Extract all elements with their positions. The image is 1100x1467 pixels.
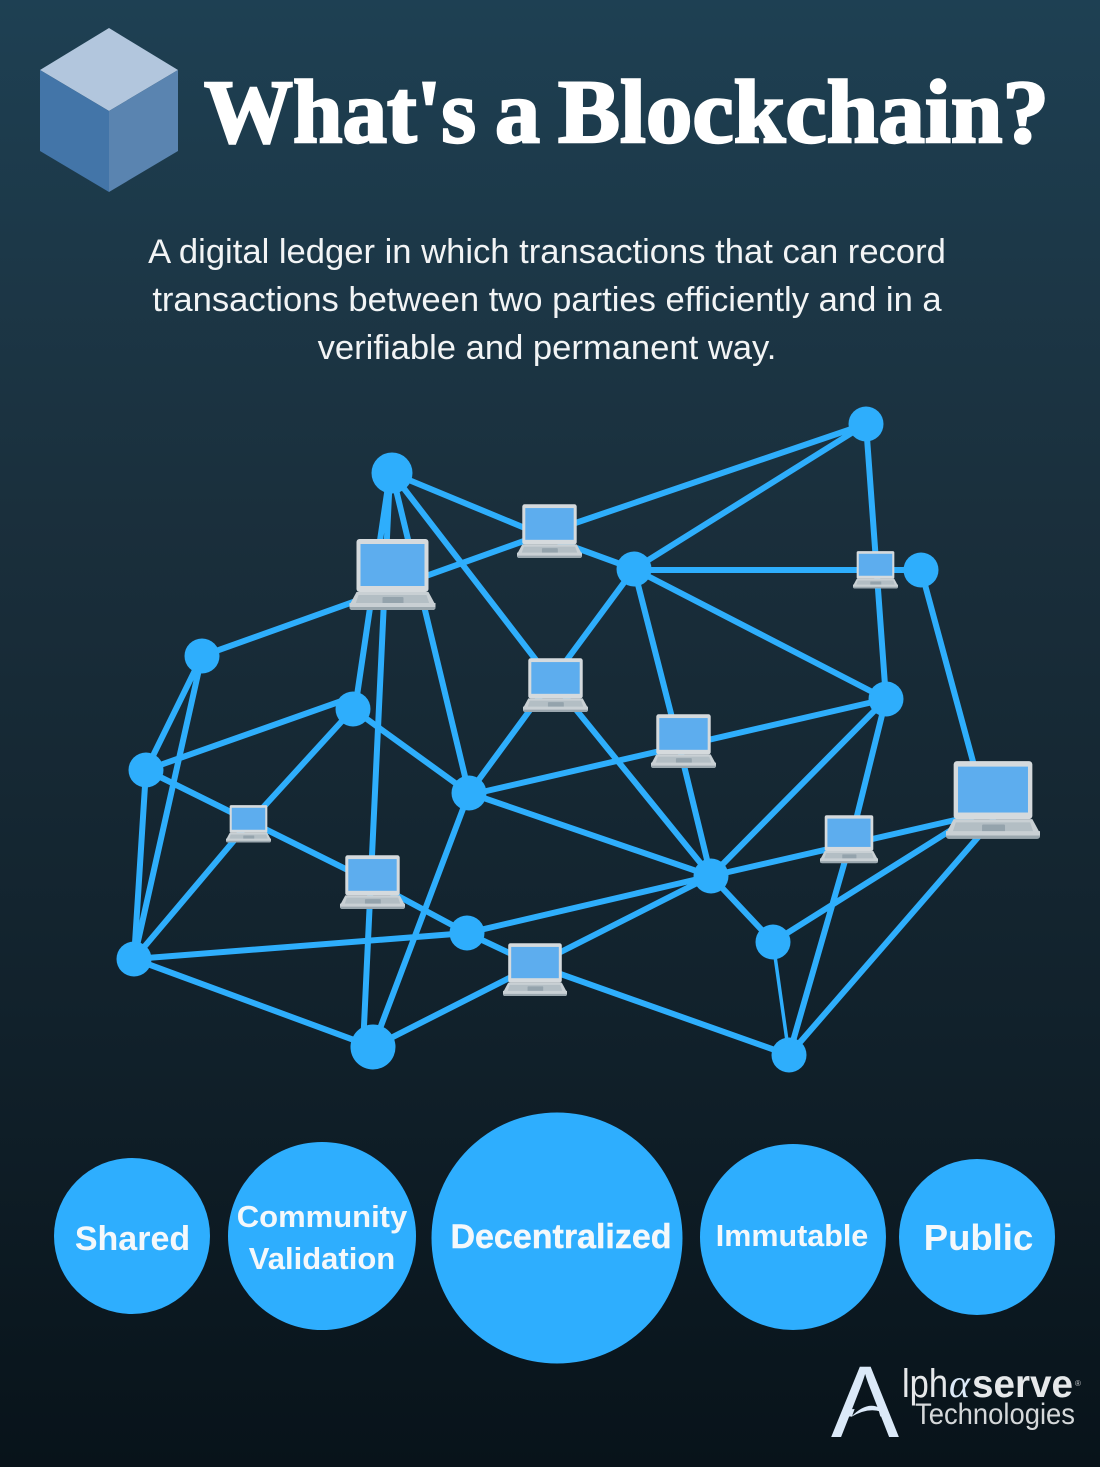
network diagram (116, 406, 1040, 1072)
circle: Immutable: Immutable (716, 1219, 868, 1253)
intro text block (148, 233, 946, 367)
title: a (495, 63, 540, 162)
circle: Decentralized (432, 1112, 682, 1364)
title: Blockchain? (558, 63, 1049, 162)
circle: Shared: Shared (75, 1220, 190, 1258)
circle: Decentralized: Decentralized (450, 1218, 672, 1256)
network nodes (116, 406, 938, 1072)
logo: Alphaserve Technologies (831, 1345, 1081, 1459)
network connections (134, 424, 993, 1055)
title (204, 63, 1049, 162)
logo: Alphaserve Technologies: α (949, 1361, 971, 1406)
circle: Public: Public (924, 1217, 1033, 1258)
intro text block: A digital ledger in which transactions that can record (148, 233, 946, 271)
logo: Alphaserve Technologies: Technologies (915, 1398, 1075, 1431)
circle: Shared (54, 1158, 210, 1314)
logo: Alphaserve Technologies: lph (902, 1362, 948, 1406)
circle: Community Validation: Community (237, 1199, 408, 1234)
logo: Alphaserve Technologies: serve (972, 1363, 1073, 1406)
icon: blockchain cube (40, 28, 178, 192)
logo: Alphaserve Technologies: ® (1075, 1379, 1081, 1388)
intro text block: transactions between two parties efficiently and in a (152, 281, 942, 319)
feature circles (54, 1112, 1055, 1364)
circle: Community Validation: Validation (249, 1241, 395, 1276)
laptops (226, 504, 1040, 996)
circle: Immutable (700, 1144, 886, 1330)
circle: Community Validation (228, 1142, 416, 1330)
intro text block: verifiable and permanent way. (318, 329, 776, 367)
circle: Public (899, 1159, 1055, 1315)
logo: Alphaserve Technologies: A (831, 1345, 899, 1459)
title: What's (204, 63, 476, 162)
